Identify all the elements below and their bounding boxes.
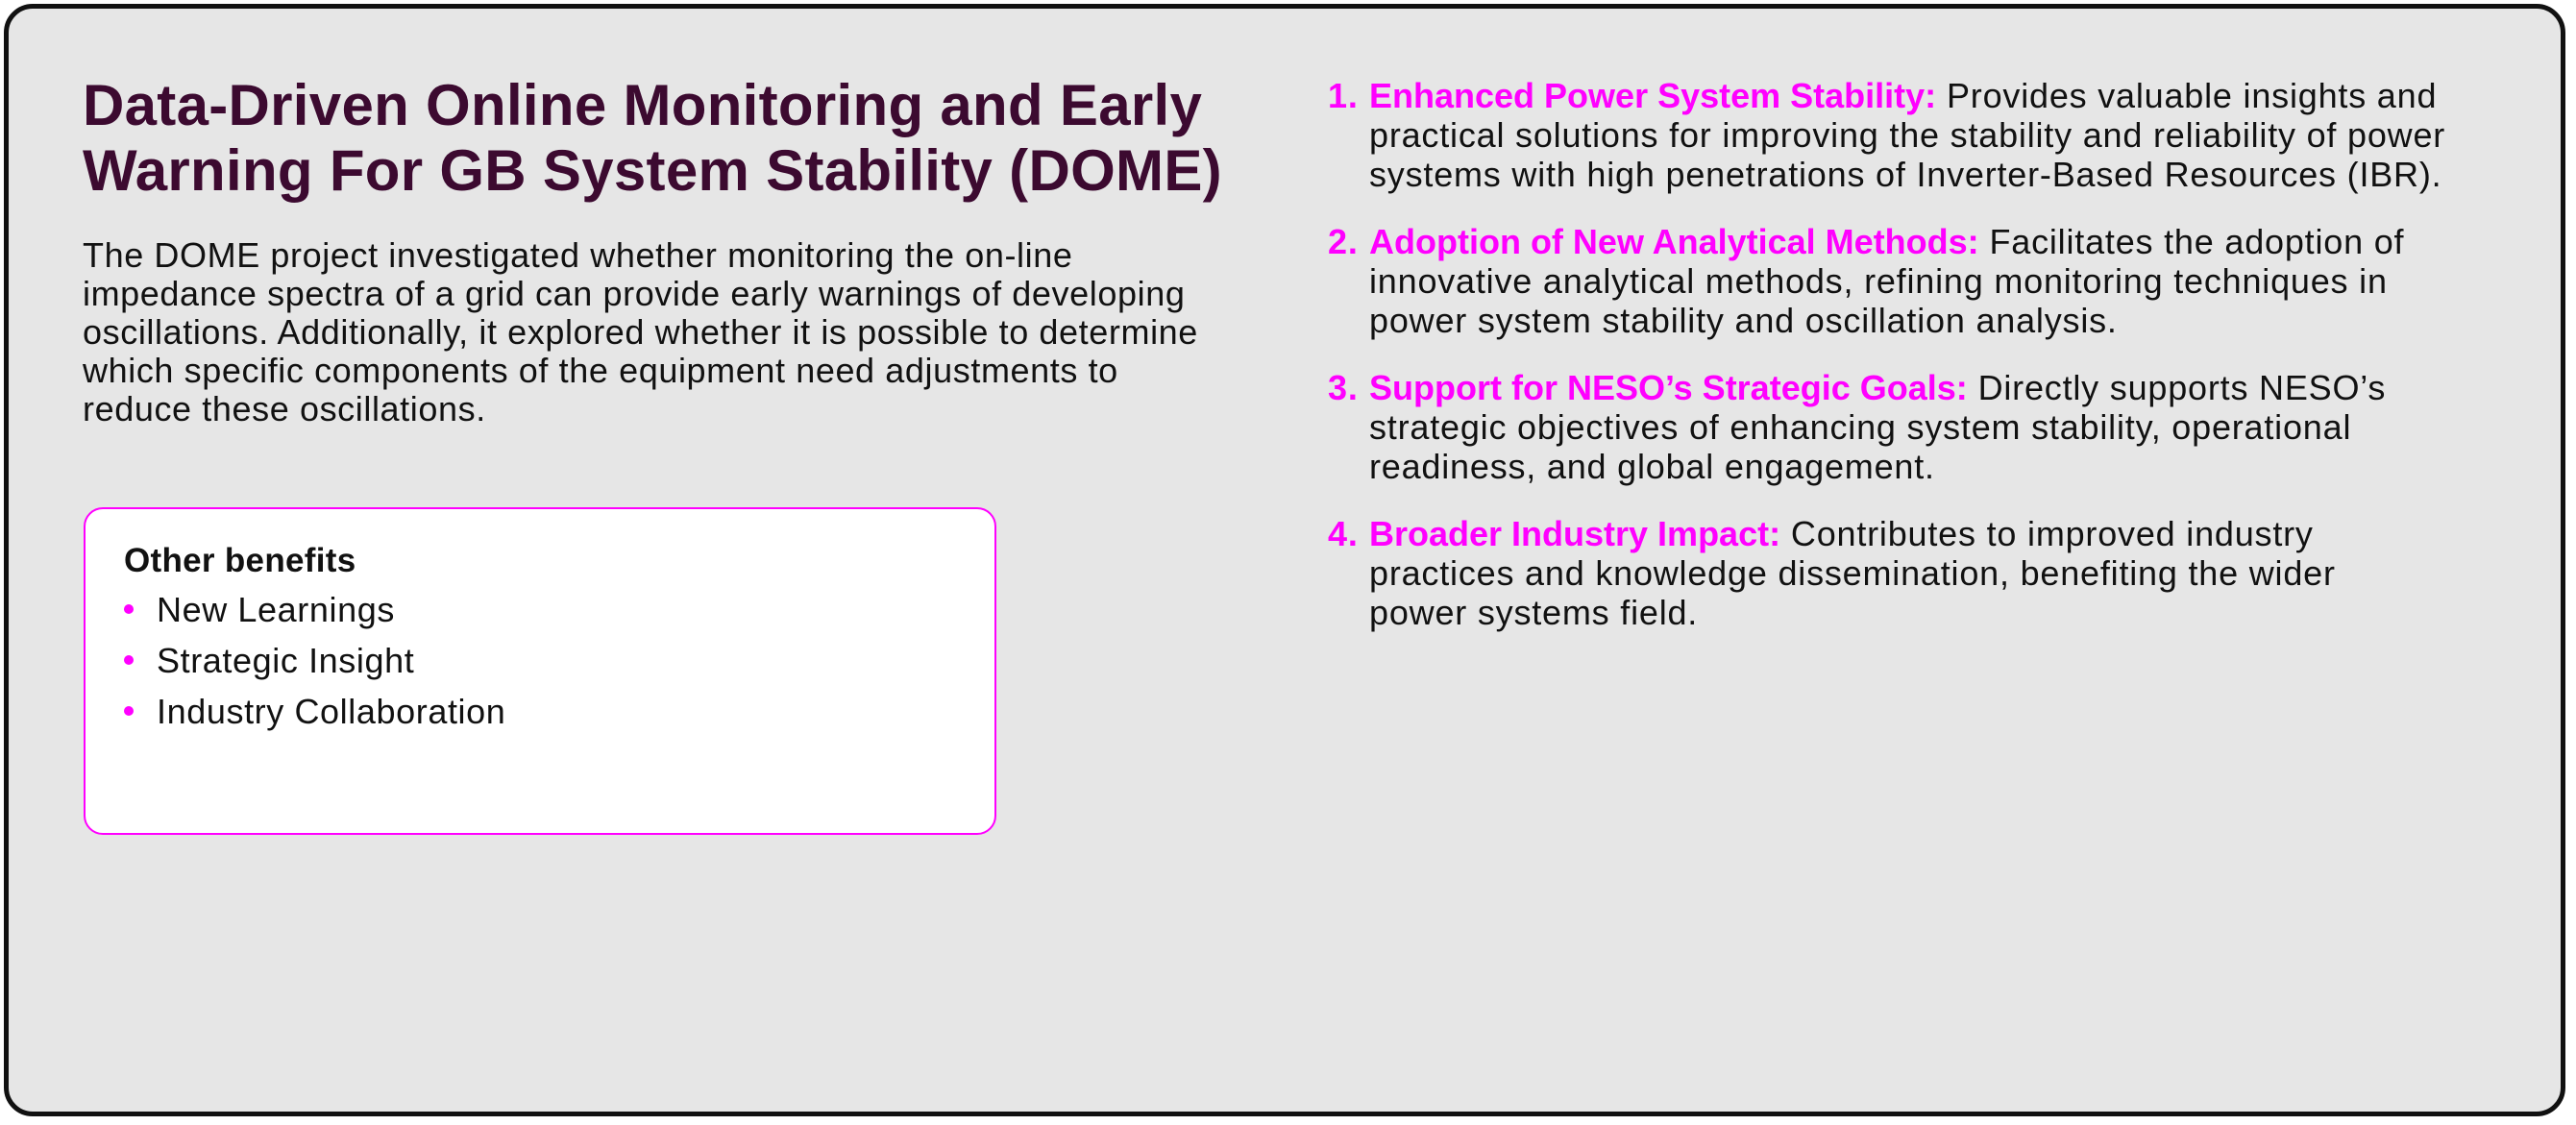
item 2: 2. <box>1328 222 1359 261</box>
item 4: 4. <box>1328 514 1359 553</box>
numbered list: benefits <box>1328 76 2445 632</box>
title: Data-Driven Online Monitoring and Early <box>83 73 1202 137</box>
text block: description: oscillations. Additionally, it explored whether it is possible to determine <box>83 312 1198 352</box>
item 3: readiness, and global engagement. <box>1369 447 1935 486</box>
item 2: Adoption of New Analytical Methods: Facilitates the adoption of <box>1369 222 2404 261</box>
title <box>83 73 1222 203</box>
item 1 <box>1328 76 2445 194</box>
text block: description: impedance spectra of a grid can provide early warnings of developing <box>83 274 1185 313</box>
item 3: 3. <box>1328 368 1359 407</box>
panel: other benefits <box>84 507 996 835</box>
text block: description: reduce these oscillations. <box>83 389 486 428</box>
item 3: strategic objectives of enhancing system stability, operational <box>1369 407 2351 447</box>
text block: description: The DOME project investigated whether monitoring the on-line <box>83 235 1072 275</box>
item 1: practical solutions for improving the stability and reliability of power <box>1369 115 2445 155</box>
item 4: Broader Industry Impact: Contributes to improved industry <box>1369 514 2314 553</box>
item 2: innovative analytical methods, refining monitoring techniques in <box>1369 261 2388 301</box>
title: Warning For GB System Stability (DOME) <box>83 138 1222 203</box>
heading: other benefits: Other benefits <box>124 542 356 579</box>
text block: description <box>83 235 1198 428</box>
item 4 <box>1328 514 2336 632</box>
bullet: industry collaboration: Industry Collaboration <box>157 692 505 731</box>
text block: description: which specific components of the equipment need adjustments to <box>83 351 1118 390</box>
bullet: new learnings: New Learnings <box>157 590 395 629</box>
item 4: power systems field. <box>1369 593 1698 632</box>
item 1: Enhanced Power System Stability: Provides valuable insights and <box>1369 76 2437 115</box>
item 2: power system stability and oscillation analysis. <box>1369 301 2118 340</box>
item 3: Support for NESO’s Strategic Goals: Directly supports NESO’s <box>1369 368 2386 407</box>
item 2 <box>1328 222 2404 340</box>
item 1: 1. <box>1328 76 1359 115</box>
item 4: practices and knowledge dissemination, benefiting the wider <box>1369 553 2336 593</box>
item 1: systems with high penetrations of Inverter-Based Resources (IBR). <box>1369 155 2441 194</box>
item 3 <box>1328 368 2386 486</box>
bullet: strategic insight: Strategic Insight <box>157 641 414 680</box>
